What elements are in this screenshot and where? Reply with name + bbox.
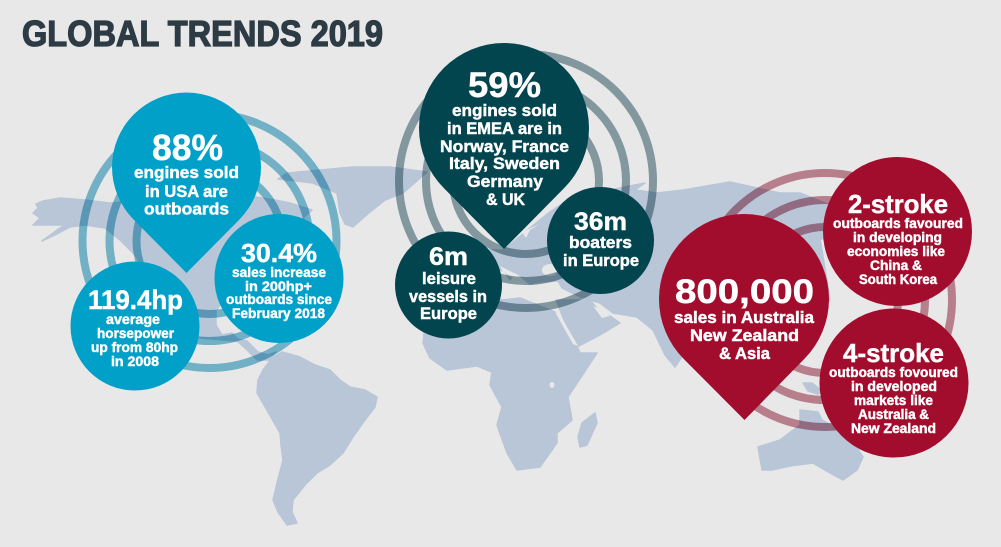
- bubble: 2-stroke: economies like: [847, 244, 945, 259]
- bubble: 30.4% sales increase: 30.4%: [241, 238, 317, 268]
- pin: 59% engines sold in EMEA: 59%: [468, 66, 541, 105]
- bubble: 36m boaters: in Europe: [563, 252, 639, 270]
- bubble: 6m leisure vessels: Europe: [420, 305, 477, 323]
- bubble: 6m leisure vessels: leisure: [422, 270, 476, 288]
- bubble: 2-stroke: in developing: [853, 230, 942, 245]
- bubble: 30.4% sales increase: in 200hp+: [245, 279, 312, 294]
- pin: 88% engines sold in USA: in USA are: [145, 183, 228, 201]
- bubble: 2-stroke: outboards favoured: [833, 216, 963, 231]
- bubble: 36m boaters: boaters: [569, 234, 632, 252]
- map: inland waters: [500, 224, 610, 388]
- pin: 88% engines sold in USA: outboards: [144, 200, 229, 218]
- rings: Americas: [82, 114, 336, 368]
- pin: 59% engines sold in EMEA: Germany: [467, 173, 544, 191]
- bubble: 30.4% sales increase: sales increase: [232, 265, 326, 280]
- world map: [33, 167, 863, 525]
- map: Eurasia: [475, 182, 850, 390]
- pin: 800,000 sales: [659, 214, 829, 420]
- map: Madagascar: [578, 413, 597, 447]
- bubble: 30.4% sales increase: February 2018: [232, 306, 325, 321]
- pin: 88% engines sold in USA: 88%: [152, 127, 223, 168]
- bubble: 119.4hp average horsepower: up from 80hp: [91, 340, 178, 355]
- pin: 59% engines sold in EMEA: [419, 43, 589, 249]
- panel: Asia Pacific: [659, 157, 972, 458]
- pin: 800,000 sales: & Asia: [719, 345, 771, 363]
- bubble: 119.4hp average horsepower: [70, 262, 200, 390]
- panel: Americas: [70, 93, 344, 391]
- bubble: 4-stroke: in developed: [851, 379, 937, 394]
- bubble: 119.4hp average horsepower: in 2008: [111, 354, 159, 369]
- map: New Guinea: [803, 383, 822, 394]
- bubble: 119.4hp average horsepower: average: [106, 312, 160, 327]
- bubble: 2-stroke: South Korea: [859, 272, 937, 287]
- map: North America: [33, 190, 312, 360]
- bubble: 36m boaters: 36m: [574, 208, 627, 236]
- map: Arabia: [556, 300, 620, 347]
- pin: 800,000 sales: 800,000: [675, 273, 814, 311]
- bubble: 4-stroke: [820, 308, 968, 458]
- bubble: 2-stroke: [823, 157, 972, 306]
- pin: 59% engines sold in EMEA: in EMEA are in: [447, 120, 562, 138]
- bubble: 6m leisure vessels: [395, 232, 502, 338]
- pin: 59% engines sold in EMEA: Italy, Sweden: [449, 155, 560, 173]
- bubble: 30.4% sales increase: [214, 214, 344, 343]
- bubble: 4-stroke: markets like: [854, 393, 933, 408]
- bubble: 6m leisure vessels: 6m: [429, 243, 468, 271]
- bubble: 4-stroke: outboards fovoured: [829, 365, 958, 380]
- map: Africa: [423, 290, 597, 470]
- bubble: 36m boaters: [547, 187, 654, 294]
- map: Australia: [758, 410, 863, 480]
- panel: EMEA: [395, 43, 654, 338]
- bubble: 30.4% sales increase: outboards since: [226, 292, 332, 307]
- pin: 59% engines sold in EMEA: & UK: [486, 191, 525, 209]
- map: South America: [257, 352, 377, 525]
- pin: 59% engines sold in EMEA: engines sold: [452, 102, 557, 120]
- bubble: 119.4hp average horsepower: 119.4hp: [88, 285, 183, 315]
- pin: 59% engines sold in EMEA: Norway, France: [440, 138, 569, 156]
- map: Greenland: [278, 167, 427, 227]
- bubble: 4-stroke: Australia &: [858, 407, 929, 422]
- pin: 800,000 sales: sales in Australia: [674, 309, 815, 327]
- pin: 88% engines sold in USA: engines sold: [134, 164, 239, 182]
- title: GLOBAL TRENDS 2019: [22, 13, 383, 54]
- pin: 88% engines sold in USA: [112, 93, 261, 273]
- rings: Asia Pacific: [698, 173, 952, 427]
- bubble: 2-stroke: 2-stroke: [848, 189, 948, 219]
- bubble: 6m leisure vessels: vessels in: [409, 288, 487, 306]
- bubble: 119.4hp average horsepower: horsepower: [97, 326, 175, 341]
- pin: 800,000 sales: New Zealand: [690, 327, 799, 345]
- bubble: 4-stroke: New Zealand: [851, 421, 936, 436]
- bubble: 2-stroke: China &: [870, 258, 922, 273]
- bubble: 4-stroke: 4-stroke: [843, 338, 944, 368]
- rings: EMEA: [399, 54, 653, 308]
